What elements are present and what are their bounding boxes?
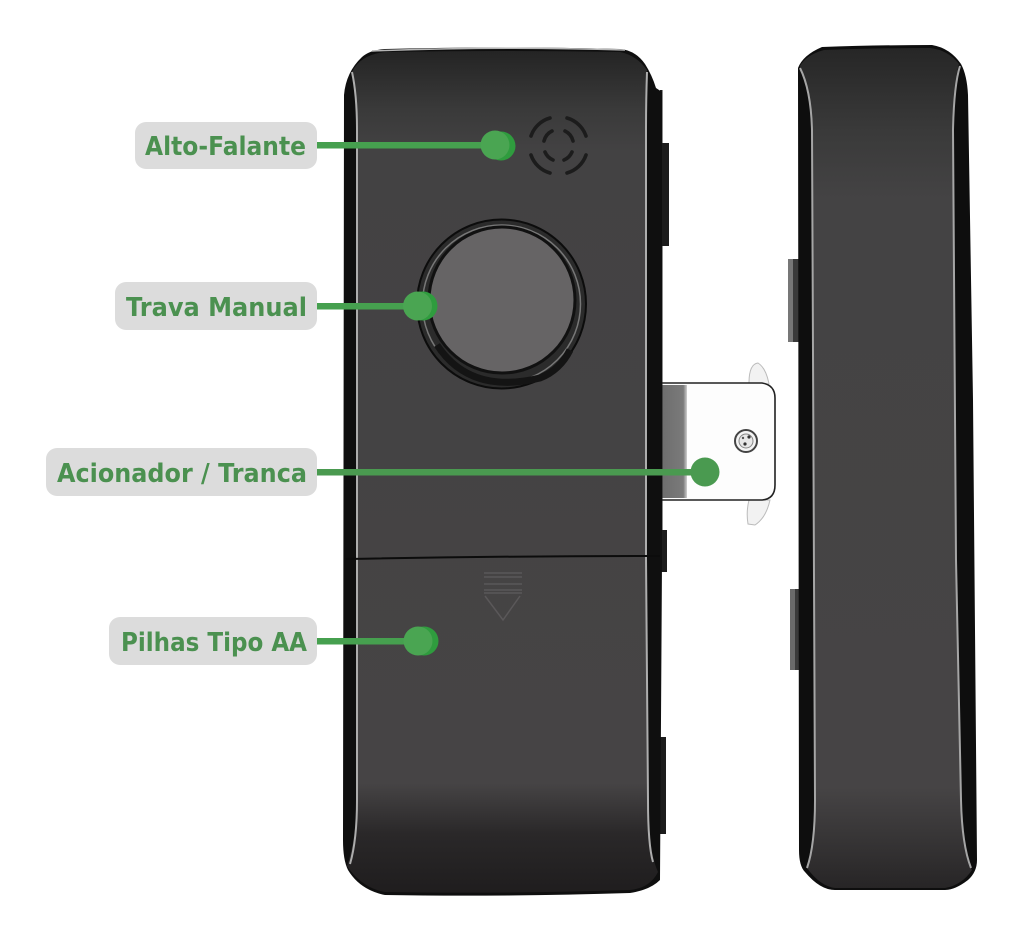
callout: Pilhas Tipo AA: Pilhas Tipo AA: [121, 628, 307, 658]
bolt screw: [735, 430, 757, 452]
side highlights: [800, 66, 971, 868]
front body: [343, 48, 662, 896]
callout: Trava Manual: [115, 282, 438, 330]
side tabs: [788, 259, 800, 670]
callout: Trava Manual: Trava Manual: [126, 293, 307, 323]
bolt / latch: [660, 363, 775, 525]
callout: Acionador / Tranca: Acionador / Tranca: [57, 459, 307, 489]
right edge tabs: [660, 90, 669, 834]
callout: Pilhas Tipo AA: [109, 617, 438, 665]
top edge highlight: [372, 48, 625, 51]
front face: [347, 51, 658, 893]
bolt shaded band: [662, 385, 687, 498]
callout: Acionador / Tranca: [46, 448, 720, 496]
callout: Alto-Falante: [135, 122, 516, 169]
side view of the lock: [788, 45, 977, 890]
side face: [800, 48, 972, 888]
icon: speaker: [531, 118, 586, 173]
bolt plate: [660, 383, 775, 500]
callout: Alto-Falante: Alto-Falante: [145, 132, 306, 162]
manual lock knob: [417, 220, 586, 388]
front view of the lock: [343, 48, 669, 896]
side body: [798, 45, 977, 890]
bolt ears: [749, 363, 769, 384]
face highlights: [350, 72, 653, 864]
battery cover seam: [346, 556, 660, 559]
battery cover arrow: [484, 573, 522, 620]
